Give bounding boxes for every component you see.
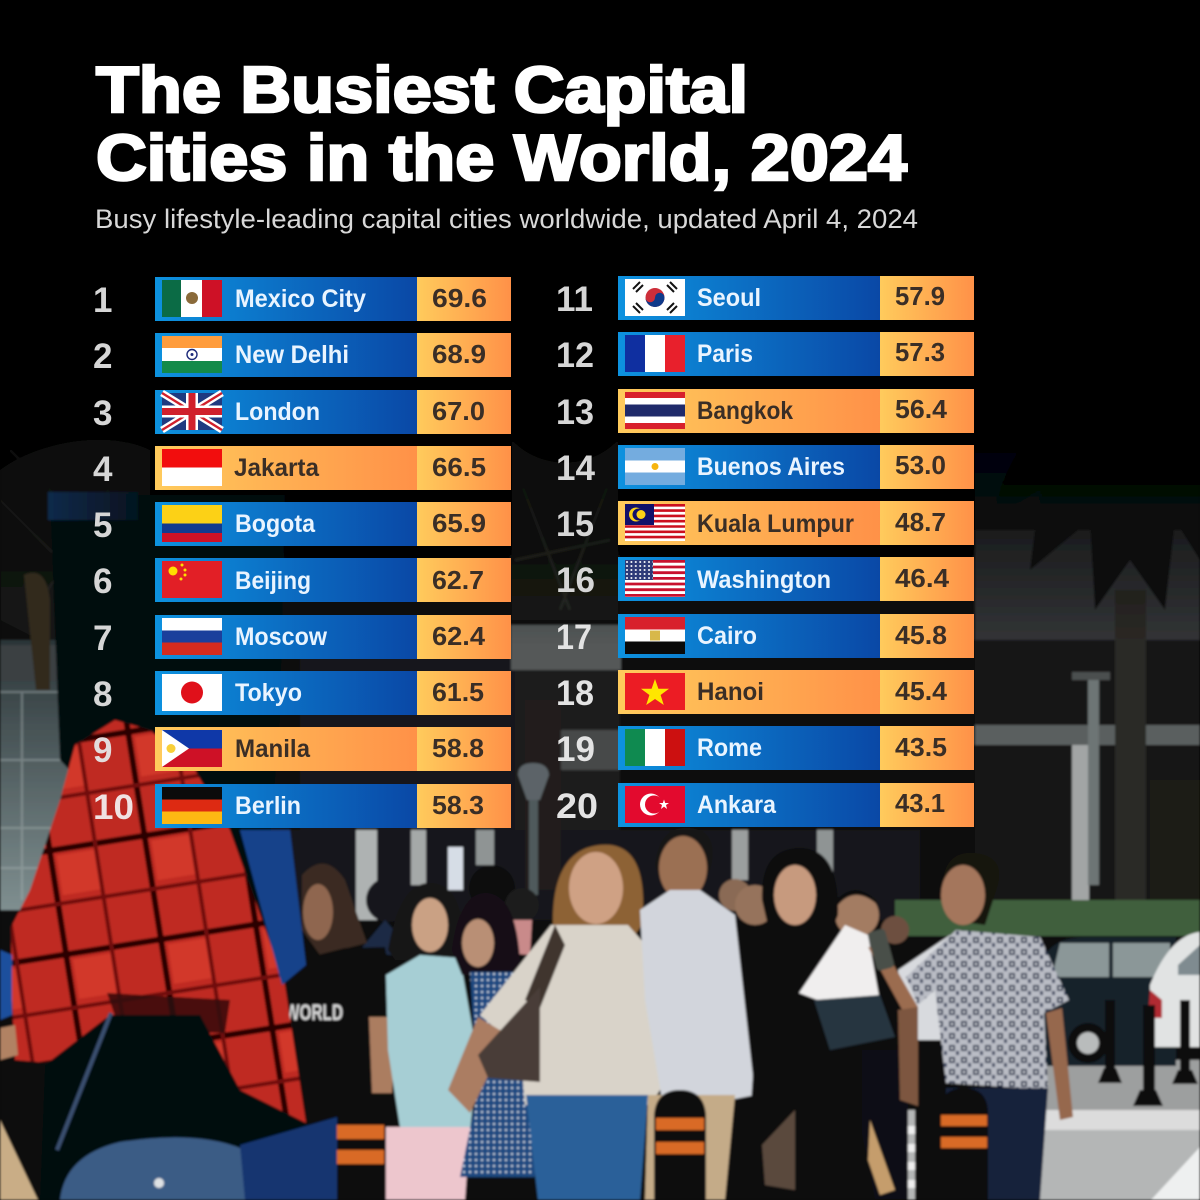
row 3: London: London: [235, 398, 320, 426]
flag: Colombia: [162, 505, 222, 542]
bollards, foreground: [332, 1088, 988, 1200]
hedge and road: [870, 900, 1200, 1200]
row 2: New Delhi: [93, 333, 511, 377]
row 17: Cairo: Cairo: [697, 622, 757, 650]
row 2: New Delhi: 2: [93, 337, 112, 376]
row 3: London: 3: [93, 394, 112, 433]
subtitle: Busy lifestyle-leading capital cities worldwide, updated April 4, 2024: [95, 204, 918, 234]
top black fade: [0, 0, 1200, 900]
building facade, right: [975, 380, 1200, 910]
row 7: Moscow: [93, 615, 511, 659]
person: man in white shirt: [640, 828, 755, 1200]
row 6: Beijing: Beijing: [235, 567, 311, 595]
row 16: Washington: 16: [556, 561, 595, 600]
row 8: Tokyo: 61.5: [432, 677, 484, 707]
row 10: Berlin: 58.3: [432, 790, 484, 820]
row 8: Tokyo: Tokyo: [235, 679, 302, 707]
row 4: Jakarta: 66.5: [432, 452, 486, 482]
row 20: Ankara: 43.1: [895, 788, 945, 818]
parked cars: [1040, 932, 1200, 1066]
row 11: Seoul: Seoul: [697, 284, 761, 312]
flag: Philippines: [162, 730, 222, 767]
row 20: Ankara: 20: [556, 787, 598, 826]
row 8: Tokyo: 8: [93, 675, 112, 714]
row 13: Bangkok: 56.4: [895, 394, 948, 424]
row 9: Manila: [93, 727, 511, 771]
row 5: Bogota: 5: [93, 506, 112, 545]
row 13: Bangkok: [556, 389, 974, 433]
row 4: Jakarta: [93, 446, 511, 490]
row 9: Manila: 58.8: [432, 733, 484, 763]
row 16: Washington: Washington: [697, 566, 831, 594]
person: girl in light blue hoodie: [383, 883, 478, 1200]
row 1: Mexico City: Mexico City: [235, 285, 366, 313]
flag: Mexico: [162, 280, 222, 317]
row 18: Hanoi: Hanoi: [697, 678, 764, 706]
street lamp: [518, 763, 549, 895]
row 3: London: [93, 390, 511, 434]
person: woman in polka-dot dress: [452, 893, 535, 1177]
row 14: Buenos Aires: 14: [556, 449, 596, 488]
row 3: London: 67.0: [432, 396, 485, 426]
foreground person in red plaid shirt: [0, 492, 337, 1200]
row 11: Seoul: 11: [556, 280, 593, 319]
row 7: Moscow: 62.4: [432, 621, 486, 651]
row 11: Seoul: [556, 276, 974, 320]
row 14: Buenos Aires: 53.0: [895, 450, 946, 480]
flag: France: [625, 335, 685, 372]
row 10: Berlin: Berlin: [235, 792, 301, 820]
flag: United Kingdom: [162, 393, 222, 430]
flag: Vietnam: [625, 673, 685, 710]
row 5: Bogota: 65.9: [432, 508, 486, 538]
flag: Malaysia: [625, 504, 685, 541]
person: woman in black t-shirt: [285, 864, 398, 1180]
row 10: Berlin: 10: [93, 788, 134, 827]
title: [96, 53, 907, 194]
row 9: Manila: 9: [93, 731, 112, 770]
row 1: Mexico City: 1: [93, 281, 112, 320]
person: man in patterned polo: [867, 853, 1073, 1200]
person: woman in black t-shirt: WORLD: [285, 1000, 343, 1025]
row 5: Bogota: [93, 502, 511, 546]
row 7: Moscow: 7: [93, 619, 112, 658]
flag: Turkey: [625, 786, 685, 823]
row 12: Paris: [556, 332, 974, 376]
flag: United States: [625, 560, 685, 597]
row 8: Tokyo: [93, 671, 511, 715]
row 18: Hanoi: 18: [556, 674, 594, 713]
row 18: Hanoi: 45.4: [895, 676, 948, 706]
row 19: Rome: 19: [556, 730, 595, 769]
flag: Germany: [162, 787, 222, 824]
row 17: Cairo: [556, 614, 974, 658]
row 14: Buenos Aires: [556, 445, 974, 489]
ranking: right column, 11 to 20: [556, 276, 974, 827]
building facade, centre: [60, 625, 920, 920]
row 16: Washington: [556, 557, 974, 601]
row 12: Paris: Paris: [697, 340, 753, 368]
title: Cities in the World, 2024: [96, 121, 907, 194]
row 13: Bangkok: 13: [556, 393, 594, 432]
row 15: Kuala Lumpur: 48.7: [895, 507, 946, 537]
flag: Japan: [162, 674, 222, 711]
row 15: Kuala Lumpur: [556, 501, 974, 545]
row 16: Washington: 46.4: [895, 563, 950, 593]
flag: Argentina: [625, 448, 685, 485]
row 19: Rome: Rome: [697, 734, 762, 762]
row 6: Beijing: 6: [93, 562, 112, 601]
row 15: Kuala Lumpur: 15: [556, 505, 594, 544]
row 6: Beijing: [93, 558, 511, 602]
row 2: New Delhi: New Delhi: [235, 341, 349, 369]
row 13: Bangkok: Bangkok: [697, 397, 793, 425]
row 4: Jakarta: Jakarta: [234, 454, 320, 482]
row 17: Cairo: 17: [556, 618, 592, 657]
row 15: Kuala Lumpur: Kuala Lumpur: [697, 510, 854, 538]
ranking: left column, 1 to 10: [93, 277, 511, 828]
row 19: Rome: 43.5: [895, 732, 947, 762]
row 14: Buenos Aires: Buenos Aires: [697, 453, 845, 481]
person: woman in black dress: [745, 848, 895, 1200]
row 12: Paris: 12: [556, 336, 594, 375]
flag: Indonesia: [162, 449, 222, 486]
flag: South Korea: [625, 279, 685, 316]
background crowd: [360, 865, 955, 1200]
row 1: Mexico City: [93, 277, 511, 321]
row 5: Bogota: Bogota: [235, 510, 316, 538]
palm trees: [0, 350, 1200, 935]
flag: Italy: [625, 729, 685, 766]
flag: China: [162, 561, 222, 598]
row 19: Rome: [556, 726, 974, 770]
building facade, left: [0, 640, 70, 910]
row 1: Mexico City: 69.6: [432, 283, 487, 313]
bollards, right: [1098, 1000, 1198, 1106]
row 18: Hanoi: [556, 670, 974, 714]
flag: Russia: [162, 618, 222, 655]
flag: India: [162, 336, 222, 373]
row 17: Cairo: 45.8: [895, 620, 947, 650]
row 10: Berlin: [93, 784, 511, 828]
row 4: Jakarta: 4: [93, 450, 113, 489]
row 7: Moscow: Moscow: [235, 623, 328, 651]
row 11: Seoul: 57.9: [895, 281, 945, 311]
flag: Egypt: [625, 617, 685, 654]
person: woman in cream sweater: [448, 845, 692, 1200]
row 9: Manila: Manila: [235, 735, 311, 763]
flag: Thailand: [625, 392, 685, 429]
row 6: Beijing: 62.7: [432, 565, 484, 595]
row 2: New Delhi: 68.9: [432, 339, 486, 369]
row 20: Ankara: [556, 783, 974, 827]
row 20: Ankara: Ankara: [697, 791, 777, 819]
row 12: Paris: 57.3: [895, 337, 945, 367]
title: The Busiest Capital: [96, 53, 748, 126]
